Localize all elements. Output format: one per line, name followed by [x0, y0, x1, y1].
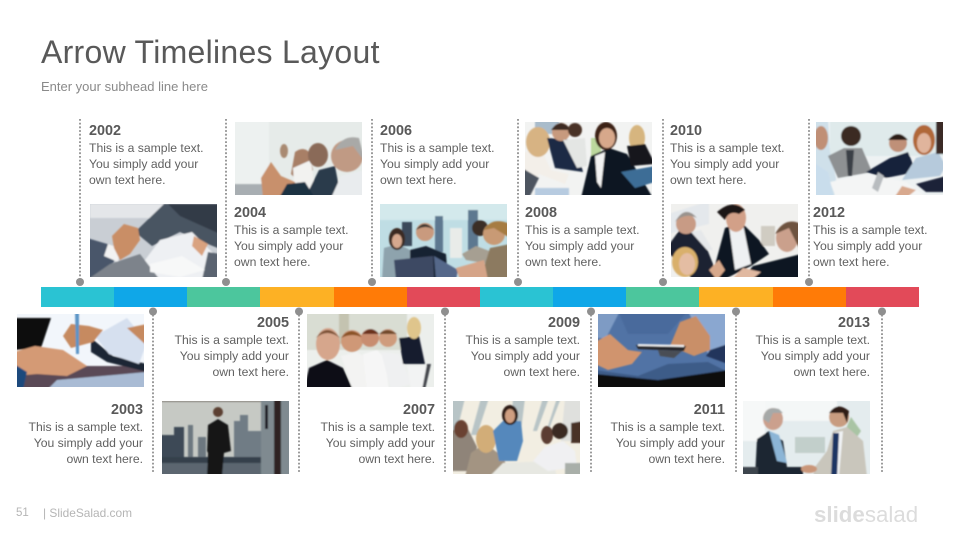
text: 2005: This is a sample text.	[175, 333, 289, 347]
photo: team smiling	[307, 314, 434, 387]
text: 2012: own text here.	[813, 255, 890, 269]
text: 2012: This is a sample text.	[813, 223, 927, 237]
text: 2010	[670, 123, 784, 187]
text: 2010: You simply add your	[670, 157, 779, 171]
timeline bar	[41, 287, 919, 307]
photo: two businessmen shaking hands	[743, 401, 870, 474]
text: 2003: own text here.	[66, 452, 143, 466]
text: 2013: 2013	[838, 315, 870, 331]
text: 2002: 2002	[89, 123, 121, 139]
text: 2011: 2011	[694, 402, 725, 418]
photo: woman presenting at table	[453, 401, 580, 474]
text: 2006: This is a sample text.	[380, 141, 494, 155]
text: 2003: 2003	[111, 402, 143, 418]
text: 2012: You simply add your	[813, 239, 922, 253]
text: 2009: 2009	[548, 315, 580, 331]
text: 2008: 2008	[525, 205, 557, 221]
text: 2002: own text here.	[89, 173, 166, 187]
text: 2008	[525, 205, 639, 269]
text: 2004: You simply add your	[234, 239, 343, 253]
text: 2005	[174, 315, 289, 379]
photo: executives shaking hands	[671, 204, 798, 277]
text: 2007	[320, 402, 435, 466]
text: 2002: You simply add your	[89, 157, 198, 171]
text: 2004: This is a sample text.	[234, 223, 348, 237]
footer: page number: 51	[16, 507, 29, 519]
photo: corporate team at table	[816, 122, 943, 195]
photo: hands holding smartphone	[598, 314, 725, 387]
text: 2010: This is a sample text.	[670, 141, 784, 155]
text: 2007: 2007	[403, 402, 435, 418]
text: 2002	[89, 123, 203, 187]
text: 2002: This is a sample text.	[89, 141, 203, 155]
text: 2007: This is a sample text.	[321, 420, 435, 434]
text: 2006: 2006	[380, 123, 412, 139]
photo: team with laptop	[380, 204, 507, 277]
text: 2003: You simply add your	[34, 436, 143, 450]
text: 2009: This is a sample text.	[466, 333, 580, 347]
text: 2008: This is a sample text.	[525, 223, 639, 237]
text: 2011: You simply add your	[616, 436, 725, 450]
text: 2011	[610, 402, 725, 466]
photo: business woman in meeting	[525, 122, 652, 195]
text: 2013: You simply add your	[761, 349, 870, 363]
footer: website: | SlideSalad.com	[43, 506, 132, 520]
text: 2004: 2004	[234, 205, 266, 221]
text: 2007: You simply add your	[326, 436, 435, 450]
text: 2006: own text here.	[380, 173, 457, 187]
text: 2006: You simply add your	[380, 157, 489, 171]
text: 2004	[234, 205, 348, 269]
text: 2007: own text here.	[358, 452, 435, 466]
text: 2011: own text here.	[648, 452, 725, 466]
logo: slidesalad: slidesalad	[814, 502, 918, 527]
text: 2013: own text here.	[793, 365, 870, 379]
text: 2004: own text here.	[234, 255, 311, 269]
text: 2012: 2012	[813, 205, 845, 221]
photo: man overlooking city	[162, 401, 289, 474]
text: 2005: You simply add your	[180, 349, 289, 363]
photo: handshake	[90, 204, 217, 277]
text: 2009	[466, 315, 580, 379]
text: 2012	[813, 205, 927, 269]
subhead: Enter your subhead line here	[41, 79, 208, 94]
text: 2003: This is a sample text.	[29, 420, 143, 434]
text: 2009: You simply add your	[471, 349, 580, 363]
title: Arrow Timelines Layout	[41, 34, 380, 70]
photo: reviewing documents	[17, 314, 144, 387]
text: 2010: 2010	[670, 123, 702, 139]
text: 2010: own text here.	[670, 173, 747, 187]
text: 2011: This is a sample text.	[611, 420, 725, 434]
photo: applauding audience	[235, 122, 362, 195]
text: 2008: own text here.	[525, 255, 602, 269]
text: 2013: This is a sample text.	[756, 333, 870, 347]
text: 2005: 2005	[257, 315, 289, 331]
text: 2006	[380, 123, 494, 187]
text: 2005: own text here.	[212, 365, 289, 379]
text: 2009: own text here.	[503, 365, 580, 379]
text: 2013	[756, 315, 870, 379]
text: 2008: You simply add your	[525, 239, 634, 253]
text: 2003	[28, 402, 143, 466]
